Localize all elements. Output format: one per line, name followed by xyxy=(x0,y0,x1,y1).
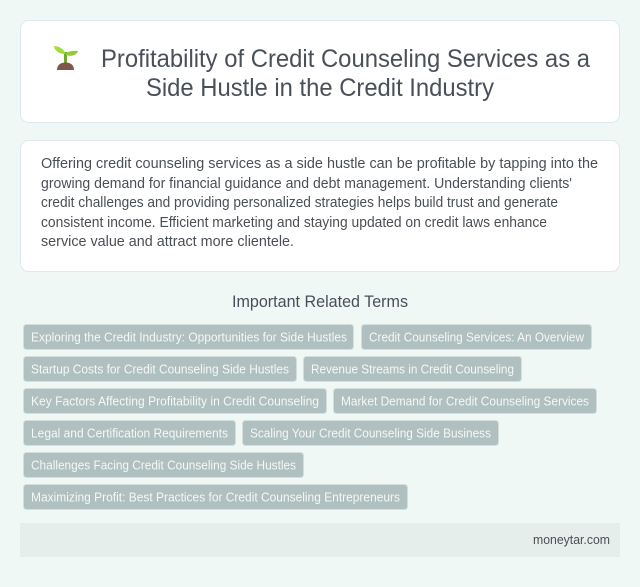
tag: Challenges Facing Credit Counseling Side Hustles xyxy=(31,458,296,472)
text block: description: service value and attract more clientele. xyxy=(41,233,294,250)
heading: important related terms: Important Related Terms xyxy=(232,293,408,311)
tag xyxy=(304,356,522,382)
tag: Credit Counseling Services: An Overview xyxy=(369,330,585,344)
tag: Scaling Your Credit Counseling Side Business xyxy=(250,426,491,440)
text block: description: growing demand for financial guidance and debt management. Understanding clients' xyxy=(41,175,572,192)
title: Side Hustle in the Credit Industry xyxy=(146,74,494,102)
tag xyxy=(24,324,354,350)
panel: title card xyxy=(20,20,620,122)
icon: sprout xyxy=(54,46,78,70)
tag: Maximizing Profit: Best Practices for Credit Counseling Entrepreneurs xyxy=(31,490,400,504)
text block: description: credit challenges and providing personalized strategies helps build trust and generate xyxy=(41,194,558,211)
tag: Market Demand for Credit Counseling Services xyxy=(341,394,589,408)
text block: description: consistent income. Efficient marketing and staying updated on credit laws enhance xyxy=(41,214,547,231)
tag xyxy=(24,356,296,382)
tag: Startup Costs for Credit Counseling Side Hustles xyxy=(31,362,289,376)
title xyxy=(101,45,590,102)
panel: description xyxy=(20,140,620,272)
tag: Exploring the Credit Industry: Opportunities for Side Hustles xyxy=(31,330,347,344)
tag xyxy=(24,388,326,414)
footer xyxy=(20,523,620,557)
text block: description: Offering credit counseling services as a side hustle can be profitable by tapping into the xyxy=(41,155,598,172)
tag xyxy=(242,420,498,446)
tag xyxy=(362,324,592,350)
tag xyxy=(334,388,596,414)
tag xyxy=(24,420,236,446)
tag: Legal and Certification Requirements xyxy=(31,426,228,440)
text block: description xyxy=(41,155,598,250)
tag list xyxy=(24,324,596,510)
tag xyxy=(24,452,304,478)
tag: Key Factors Affecting Profitability in Credit Counseling xyxy=(31,394,319,408)
footer text: moneytar.com xyxy=(533,532,610,547)
title: Profitability of Credit Counseling Services as a xyxy=(101,45,590,73)
tag xyxy=(24,484,408,510)
tag: Revenue Streams in Credit Counseling xyxy=(311,362,514,376)
